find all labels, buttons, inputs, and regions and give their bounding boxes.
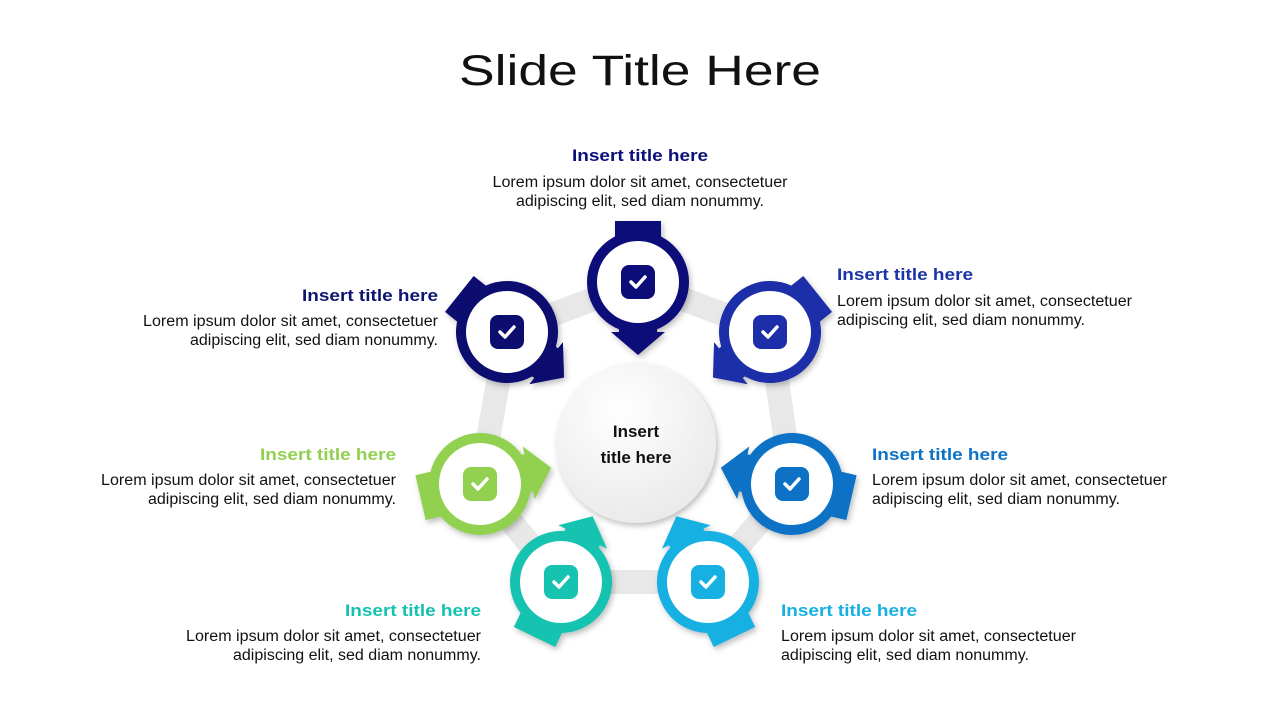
text: top-left: Insert title here bbox=[302, 286, 438, 305]
text: bottom-left: Insert title here bbox=[345, 601, 481, 620]
text: top-left: adipiscing elit, sed diam nonummy. bbox=[190, 332, 438, 349]
center circle: Insert bbox=[613, 422, 659, 441]
text: bottom-right: adipiscing elit, sed diam nonummy. bbox=[781, 647, 1029, 664]
text: top: Insert title here bbox=[572, 146, 708, 165]
text: top-right: Lorem ipsum dolor sit amet, consectetuer bbox=[837, 293, 1132, 310]
node: bottom-right bbox=[630, 494, 780, 659]
text: top-left bbox=[143, 286, 438, 349]
node: left bbox=[409, 418, 563, 547]
text: left: Lorem ipsum dolor sit amet, consectetuer bbox=[101, 472, 396, 489]
text: right: Lorem ipsum dolor sit amet, consectetuer bbox=[872, 472, 1167, 489]
text: right bbox=[872, 445, 1167, 508]
text: top bbox=[492, 146, 788, 210]
text: bottom-left: adipiscing elit, sed diam nonummy. bbox=[233, 647, 481, 664]
text: top-left: Lorem ipsum dolor sit amet, consectetuer bbox=[143, 313, 438, 330]
text: left bbox=[101, 445, 396, 508]
text: bottom-right: Lorem ipsum dolor sit amet, consectetuer bbox=[781, 628, 1076, 645]
node: bottom-left bbox=[489, 494, 639, 659]
node: top-left bbox=[428, 254, 596, 417]
text: bottom-right bbox=[781, 601, 1076, 664]
text: top-right: adipiscing elit, sed diam nonummy. bbox=[837, 312, 1085, 329]
node: top-right bbox=[681, 254, 849, 417]
text: right: Insert title here bbox=[872, 445, 1008, 464]
center circle: title here bbox=[601, 448, 671, 467]
text: left: Insert title here bbox=[260, 445, 396, 464]
text: bottom-left bbox=[186, 601, 481, 664]
text: right: adipiscing elit, sed diam nonummy. bbox=[872, 491, 1120, 508]
text: top: Lorem ipsum dolor sit amet, consectetuer bbox=[492, 174, 788, 191]
node: right bbox=[709, 418, 863, 547]
text: bottom-right: Insert title here bbox=[781, 601, 917, 620]
title: Slide Title Here bbox=[459, 47, 821, 95]
center circle bbox=[556, 363, 716, 523]
text: top: adipiscing elit, sed diam nonummy. bbox=[516, 193, 764, 210]
text: left: adipiscing elit, sed diam nonummy. bbox=[148, 491, 396, 508]
text: bottom-left: Lorem ipsum dolor sit amet, consectetuer bbox=[186, 628, 481, 645]
text: top-right bbox=[837, 265, 1132, 329]
node: top bbox=[587, 221, 689, 355]
heptagon connector ring bbox=[480, 282, 792, 582]
text: top-right: Insert title here bbox=[837, 265, 973, 284]
